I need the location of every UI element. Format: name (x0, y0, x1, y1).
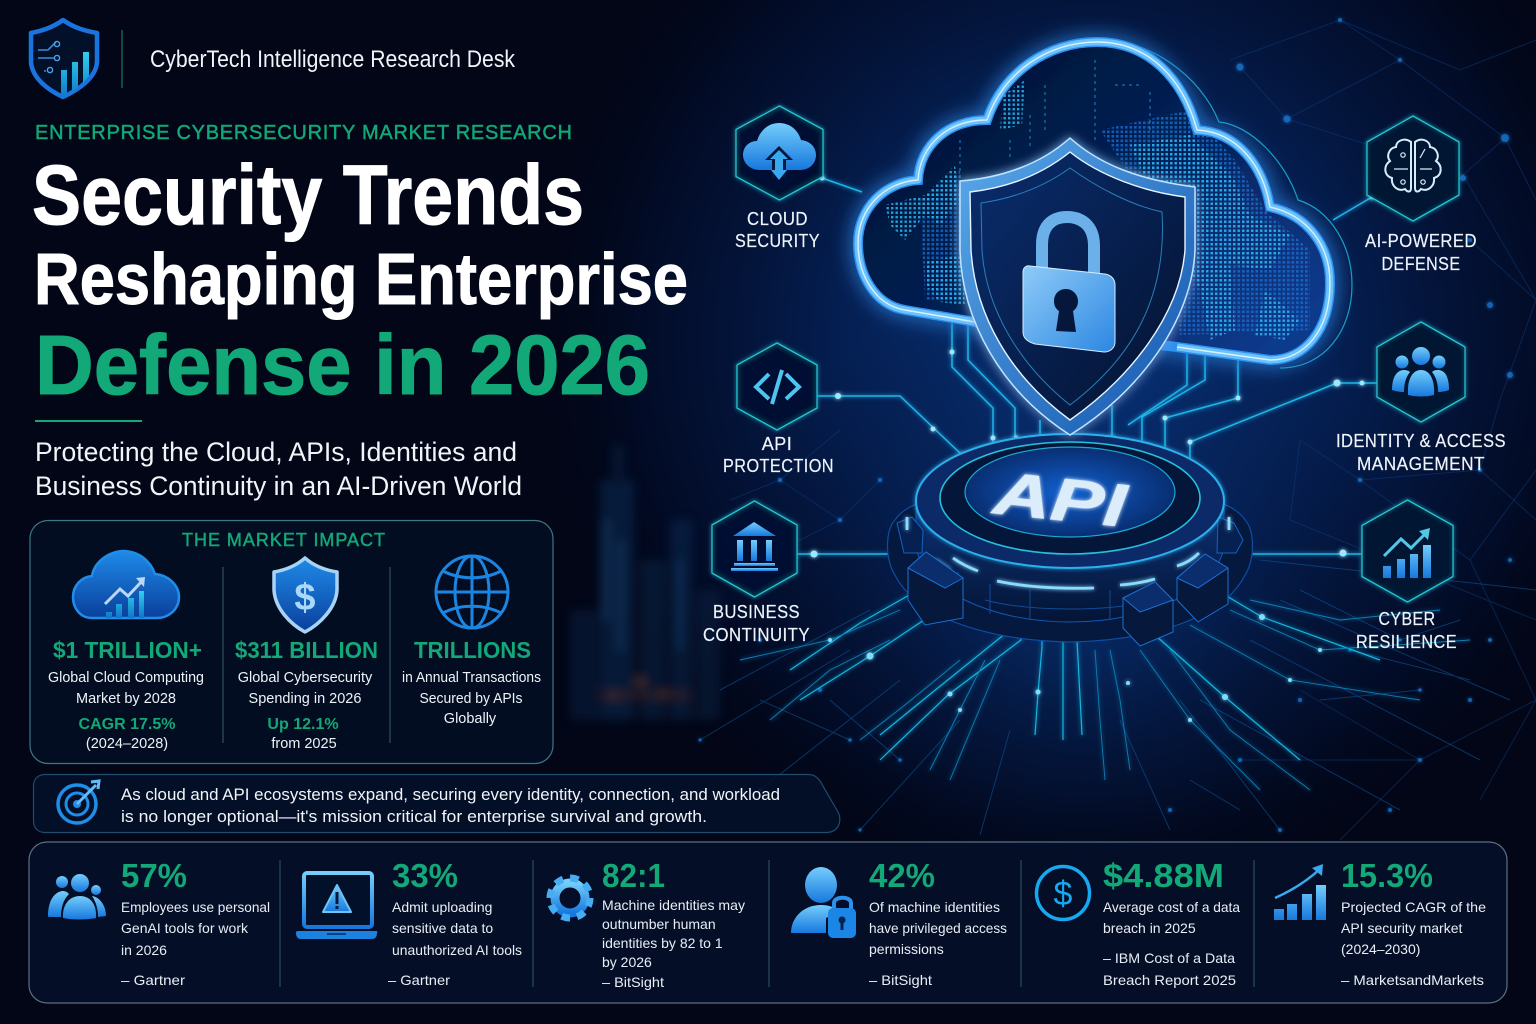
label: API (762, 434, 792, 454)
platform panel seams (928, 560, 1185, 620)
label (1356, 609, 1457, 652)
market panel heading: THE MARKET IMPACT (182, 530, 385, 550)
subtitle: Business Continuity in an AI-Driven World (35, 471, 522, 501)
stat: privileged access (791, 857, 1007, 988)
hexagon: business continuity (703, 501, 810, 645)
icon: people group (1392, 347, 1449, 396)
panel: key statistics (29, 842, 1507, 1003)
circuit lines: lower fan from platform (740, 588, 1470, 790)
stat: API security market growth (1274, 857, 1486, 988)
stat: API security market growth: Projected CAGR of the (1341, 899, 1486, 915)
stat: personal GenAI use: GenAI tools for work (121, 920, 249, 936)
stat: cybersecurity spending: from 2025 (271, 736, 337, 752)
illustration: central cloud (858, 42, 1330, 360)
stat: cybersecurity spending: Up 12.1% (267, 716, 339, 733)
stat: API security market growth: API security market (1341, 920, 1462, 936)
stat: privileged access: – BitSight (869, 972, 932, 988)
stat: cloud market: (2024–2028) (86, 736, 168, 752)
icon: gear (550, 878, 590, 918)
platform side tabs (897, 517, 1243, 553)
platform base body (888, 482, 1252, 642)
icon: dollar coin: $ (1054, 875, 1073, 913)
stat: cost of data breach: – IBM Cost of a Data (1103, 950, 1235, 966)
hexagon: identity and access management (1336, 322, 1506, 474)
callout text: As cloud and API ecosystems expand, securing every identity, connection, and workload (121, 785, 780, 804)
stat: API transactions: in Annual Transactions (402, 670, 541, 686)
icon: rising bar chart (1383, 528, 1431, 578)
stat: cloud market: Global Cloud Computing (48, 670, 204, 686)
stat: machine identities ratio (550, 857, 745, 990)
stat: machine identities ratio: identities by 82 to 1 (602, 935, 723, 951)
padlock body (1023, 266, 1115, 352)
circuit nodes: lower fan (828, 602, 1322, 722)
stat: sensitive data uploads: – Gartner (388, 972, 450, 988)
logo divider (122, 30, 123, 88)
circuit lines: connectors to hexagons and platform (797, 178, 1377, 554)
stat: sensitive data uploads: sensitive data to (392, 920, 493, 936)
icon: cloud with growth chart (73, 551, 179, 618)
icon: institution building (731, 522, 778, 571)
stat: API transactions: TRILLIONS (414, 637, 531, 663)
stat: privileged access: 42% (869, 857, 935, 894)
stat: sensitive data uploads: 33% (392, 857, 458, 894)
label: PROTECTION (723, 456, 834, 476)
platform: API pedestal (888, 434, 1252, 646)
callout text (121, 785, 780, 826)
hexagon: API protection (723, 343, 834, 476)
logo: shield with circuit and bars (31, 20, 97, 98)
stat: personal GenAI use: 57% (121, 857, 187, 894)
stat: cloud market: CAGR 17.5% (79, 716, 175, 733)
platform top disc (916, 434, 1224, 568)
title underline (35, 420, 142, 422)
stat: machine identities ratio: Machine identities may (602, 897, 745, 913)
stat: sensitive data uploads: Admit uploading (392, 899, 492, 915)
stat: cost of data breach: $4.88M (1103, 857, 1224, 894)
stat: API security market growth: (2024–2030) (1341, 941, 1420, 957)
stat: sensitive data uploads (296, 857, 522, 988)
label (1336, 431, 1506, 474)
label: BUSINESS (713, 602, 800, 622)
stat: cost of data breach (1036, 857, 1240, 988)
subtitle (35, 437, 522, 501)
stat: cybersecurity spending: $311 BILLION (235, 637, 378, 663)
subtitle: Protecting the Cloud, APIs, Identities and (35, 437, 517, 467)
platform front light bars (907, 517, 1229, 588)
platform inner ring (940, 442, 1200, 554)
cloud dotted world map (885, 60, 1310, 340)
stat: machine identities ratio: – BitSight (602, 974, 664, 990)
stat: API transactions (402, 637, 541, 727)
icon: person with lock (791, 867, 856, 938)
icon: dollar shield (274, 558, 337, 632)
title: Defense in 2026 (35, 318, 650, 412)
stat: machine identities ratio: by 2026 (602, 954, 652, 970)
hexagon: cloud security (735, 106, 823, 251)
stat: privileged access: have privileged access (869, 920, 1007, 936)
label: RESILIENCE (1356, 632, 1457, 652)
stat: personal GenAI use: – Gartner (121, 972, 185, 988)
label: CLOUD (747, 209, 808, 229)
stat: personal GenAI use: in 2026 (121, 942, 167, 958)
platform cylinder side (916, 500, 1224, 622)
label: SECURITY (735, 231, 820, 251)
stat: cost of data breach: Average cost of a data (1103, 899, 1240, 915)
stat: cloud market (48, 637, 204, 752)
icon: circuit brain (1385, 140, 1441, 192)
label: CONTINUITY (703, 625, 810, 645)
stat: API security market growth: – MarketsandMarkets (1341, 972, 1484, 988)
title: Security Trends (32, 148, 584, 242)
stat: cybersecurity spending: Global Cybersecurity (238, 670, 373, 686)
stat: personal GenAI use: Employees use personal (121, 899, 270, 915)
hexagon: AI-powered defense (1365, 116, 1477, 274)
title: Reshaping Enterprise (34, 240, 688, 320)
stat: cybersecurity spending (235, 637, 378, 752)
stat: cybersecurity spending: Spending in 2026 (249, 691, 361, 707)
title (32, 148, 688, 412)
label (723, 434, 834, 476)
hexagon: cyber resilience (1356, 500, 1457, 652)
padlock shackle (1042, 217, 1094, 275)
label (703, 602, 810, 645)
stat: privileged access: Of machine identities (869, 899, 1000, 915)
icon: globe (436, 556, 508, 628)
eyebrow heading: ENTERPRISE CYBERSECURITY MARKET RESEARCH (35, 122, 572, 144)
background: network mesh and data points (698, 18, 1536, 840)
stat: cloud market: Market by 2028 (76, 691, 176, 707)
stat: machine identities ratio: 82:1 (602, 857, 665, 894)
background: blurred city skyline (570, 445, 720, 720)
icon: dollar shield: $ (294, 577, 316, 619)
stat: API transactions: Globally (444, 711, 497, 727)
icon: target with arrow (58, 781, 99, 823)
panel: the market impact (30, 520, 553, 764)
label: CYBER (1378, 609, 1436, 629)
stat: API security market growth: 15.3% (1341, 857, 1433, 894)
callout banner (34, 774, 840, 832)
label: AI-POWERED (1365, 231, 1477, 251)
callout text: is no longer optional—it's mission critical for enterprise survival and growth. (121, 807, 707, 826)
icon: code brackets (756, 370, 799, 404)
stat: API transactions: Secured by APIs (420, 691, 522, 707)
label (735, 209, 820, 251)
icon: cloud with arrows (743, 123, 816, 180)
icon: growth chart (1274, 864, 1326, 920)
cloud outer 3D edge (1097, 38, 1352, 368)
circuit nodes: connectors (810, 176, 1374, 558)
icon: laptop warning (296, 873, 377, 939)
stat: privileged access: permissions (869, 941, 944, 957)
label (1365, 231, 1477, 274)
label: DEFENSE (1382, 254, 1460, 274)
stat: sensitive data uploads: unauthorized AI tools (392, 942, 522, 958)
stat: cost of data breach: breach in 2025 (1103, 920, 1196, 936)
stat: machine identities ratio: outnumber human (602, 916, 716, 932)
icon: people (48, 874, 106, 920)
stat: cost of data breach: Breach Report 2025 (1103, 972, 1236, 988)
stat: cloud market: $1 TRILLION+ (53, 637, 202, 663)
platform API disc (965, 447, 1175, 537)
illustration: shield with padlock (960, 138, 1195, 435)
label: MANAGEMENT (1357, 454, 1485, 474)
brand name: CyberTech Intelligence Research Desk (150, 46, 516, 73)
padlock keyhole (1054, 289, 1078, 332)
platform API lettering: API (988, 459, 1131, 540)
platform cubes (908, 552, 1228, 646)
stat: personal GenAI use (48, 857, 270, 988)
label: IDENTITY & ACCESS (1336, 431, 1506, 451)
icon: dollar coin (1036, 866, 1090, 920)
